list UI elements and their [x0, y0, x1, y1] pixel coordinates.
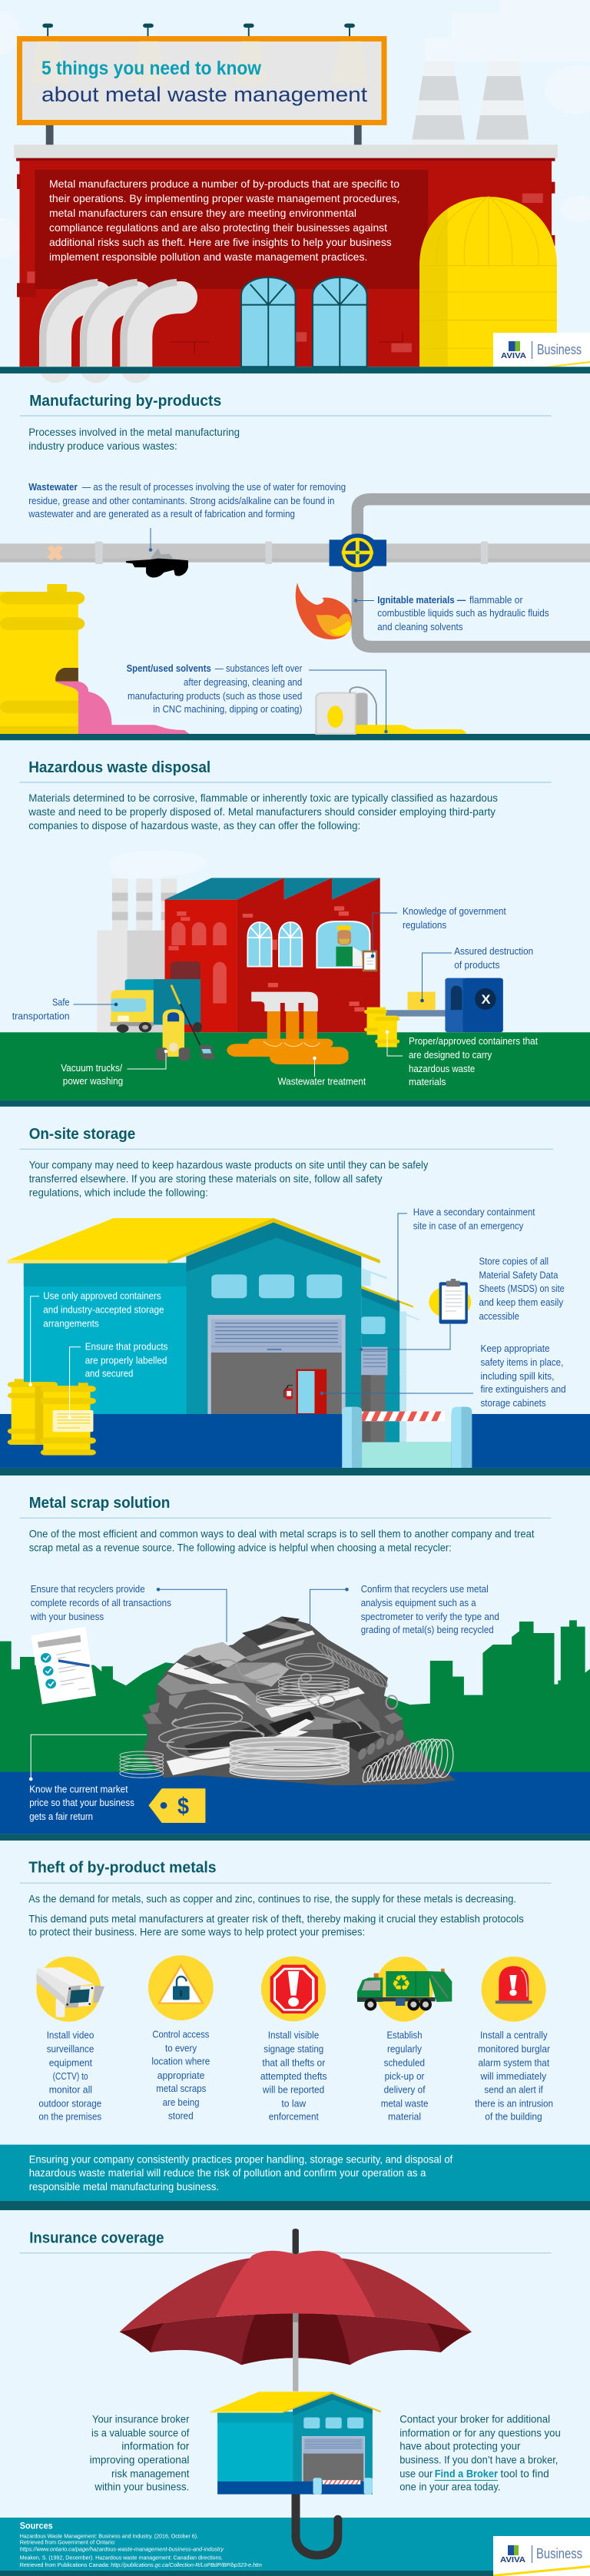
footer band	[0, 2518, 590, 2576]
callout: approved containers: materials	[409, 1076, 446, 1087]
section intro	[28, 1892, 524, 1938]
item: alarm text: will immediately	[480, 2070, 547, 2082]
flame	[296, 583, 352, 639]
sources: Meaken, S. (1992, December). Hazardous waste management: Canadian directions.	[20, 2554, 223, 2561]
callout: safe transportation: Safe	[52, 996, 69, 1007]
callout: safety items	[320, 1343, 566, 1409]
illustration: pipes and waste	[0, 500, 590, 740]
callout: approved containers: hazardous waste	[409, 1063, 475, 1074]
logo: Aviva Business: AVIVA	[501, 351, 526, 360]
sources	[20, 2521, 262, 2568]
item: alarm text: Install a centrally	[480, 2030, 548, 2041]
item: access control text: are being	[163, 2096, 200, 2108]
callout: knowledge of regulations: regulations	[403, 919, 447, 931]
callout: approved containers: arrangements	[43, 1318, 99, 1329]
callout: wastewater: — as the result of processes involving the use of water for removing	[82, 481, 346, 493]
broker text left: risk management	[111, 2468, 189, 2480]
item: alarm text: alarm system that	[478, 2057, 549, 2069]
illustration: factory building	[0, 0, 590, 373]
coil: centre stack	[230, 1737, 350, 1779]
broker text right: information or for any questions you	[399, 2427, 561, 2439]
callout: records: with your business	[30, 1611, 104, 1622]
intro text: metal manufacturers can ensure they are meeting environmental	[49, 207, 356, 219]
logo: Aviva Business footer: AVIVA	[500, 2555, 525, 2564]
section intro: transferred elsewhere. If you are storing these materials on site, follow all safety	[29, 1173, 383, 1185]
callout: vacuum trucks	[61, 1050, 167, 1087]
callout: assured destruction: Assured destruction	[454, 945, 533, 957]
broker text left: Your insurance broker	[92, 2413, 190, 2425]
item: access control text: stored	[168, 2110, 194, 2122]
item: pick-up text: pick-up or	[385, 2070, 425, 2082]
section intro: scrap metal as a revenue source. The following advice is helpful when choosing a metal recycler:	[29, 1542, 452, 1554]
clipboard icon	[429, 1279, 471, 1324]
section intro: Processes involved in the metal manufacturing	[28, 426, 240, 438]
icon: recycling symbol: ♻	[391, 1970, 411, 1996]
item: access control text: location where	[151, 2056, 210, 2067]
item: pick-up text: regularly	[387, 2043, 422, 2055]
item: pick-up text: material	[388, 2111, 421, 2123]
callout: records: complete records of all transactions	[31, 1597, 171, 1608]
icon: cctv camera	[36, 1957, 104, 2022]
callout: vacuum trucks: Vacuum trucks/	[61, 1062, 122, 1074]
intro text: compliance regulations and are also protecting their businesses against	[49, 221, 387, 234]
broker text right: Contact your broker for additional	[399, 2413, 550, 2425]
callout: secondary containment: site in case of an emergency	[413, 1220, 524, 1232]
callout: safety items: fire extinguishers and	[481, 1383, 566, 1395]
yellow drums	[364, 1007, 399, 1047]
heading: Hazardous waste disposal	[28, 759, 210, 776]
containment area	[342, 1347, 472, 1468]
panel: on-site storage	[0, 1126, 590, 1476]
silo	[419, 197, 557, 367]
heading: Theft of by-product metals	[28, 1860, 217, 1877]
faded rear building	[361, 1268, 419, 1442]
callout: safe transportation	[12, 996, 118, 1022]
item: pick-up text: scheduled	[384, 2057, 425, 2069]
spring: lower right	[361, 1738, 455, 1784]
item: access control text: to every	[165, 2043, 197, 2054]
sources: Retrieved from Publications Canada:	[20, 2561, 110, 2568]
callout: safety data sheets: Material Safety Data	[479, 1270, 559, 1281]
sources: Retrieved from Government of Ontario:	[20, 2539, 116, 2546]
icon: recycling truck	[357, 1957, 452, 2022]
broker text right: business. If you don’t have a broker,	[399, 2454, 558, 2466]
item: alarm text: there is an intrusion	[475, 2098, 553, 2110]
section intro: Your company may need to keep hazardous waste products on site until they can be safely	[29, 1159, 428, 1171]
callout: assured destruction: of products	[454, 959, 500, 971]
item: signage text: attempted thefts	[260, 2070, 327, 2082]
callout: spent solvents: — substances left over	[215, 662, 303, 674]
red door	[296, 1369, 326, 1414]
logo: Aviva Business footer	[493, 2536, 590, 2576]
clipboard	[363, 951, 377, 971]
umbrella canopy	[120, 2251, 472, 2365]
item: access control text: appropriate	[157, 2070, 204, 2081]
callout: approved containers: Proper/approved containers that	[409, 1035, 538, 1047]
icon: shredder x mark: X	[481, 992, 491, 1007]
item: signage text: enforcement	[269, 2111, 319, 2123]
callout: spent solvents: manufacturing products (such as those used	[128, 690, 302, 702]
illustration: city skyline	[0, 1620, 590, 1841]
broker text left: is a valuable source of	[91, 2427, 189, 2439]
broker text left	[90, 2413, 190, 2493]
factory	[165, 878, 380, 1032]
callout: vacuum trucks: power washing	[63, 1075, 123, 1087]
section intro: industry produce various wastes:	[28, 440, 177, 452]
valve	[330, 533, 386, 572]
callout: knowledge of regulations: Knowledge of government	[403, 905, 506, 917]
intro text: their operations. By implementing proper waste management procedures,	[49, 192, 399, 204]
section intro: This demand puts metal manufacturers at greater risk of theft, thereby making it crucial they establish protocols	[28, 1912, 524, 1924]
callout: approved containers: Use only approved containers	[43, 1290, 161, 1302]
callout: market price	[29, 1734, 147, 1822]
callout: approved containers: are designed to carry	[409, 1049, 492, 1061]
heading: Insurance coverage	[29, 2229, 164, 2246]
item: pick-up text: metal waste	[381, 2098, 428, 2110]
panel: hazardous waste disposal	[0, 759, 590, 1107]
title line 2: about metal waste management	[41, 83, 368, 106]
title line 1: 5 things you need to know	[41, 58, 262, 79]
billboard title	[20, 24, 384, 122]
callout: assured destruction	[420, 945, 533, 1002]
item: cctv text	[38, 2030, 102, 2123]
broker text right	[399, 2413, 561, 2493]
broker text right: use our	[399, 2468, 433, 2480]
intro text	[49, 178, 399, 263]
callout: analysis equipment: analysis equipment such as a	[361, 1597, 476, 1608]
item: cctv text: outdoor storage	[38, 2098, 101, 2110]
billboard lamps	[30, 24, 369, 85]
item: signage text: signage stating	[264, 2043, 323, 2055]
callout: ignitable materials: and cleaning solvents	[377, 621, 463, 632]
windows	[241, 277, 367, 367]
broker text right: Find a Broker	[435, 2468, 498, 2480]
callout: ignitable materials	[354, 594, 549, 632]
roof	[8, 1218, 380, 1263]
section intro: to protect their business. Here are some ways to help protect your premises:	[28, 1926, 365, 1938]
panel: insurance coverage	[0, 2229, 590, 2576]
callout band: conclusion: responsible metal manufacturing business.	[29, 2180, 219, 2193]
callout: approved containers: and industry-accepted storage	[43, 1304, 164, 1316]
section intro: waste and need to be properly disposed of. Metal manufacturers should consider employing third-party	[28, 805, 496, 818]
callout: spent solvents: after degreasing, cleaning and	[184, 676, 302, 688]
item: signage text	[260, 2030, 327, 2123]
illustration: disposal factory	[0, 851, 590, 1107]
callout: spent solvents	[127, 662, 388, 733]
section intro	[29, 1528, 535, 1554]
callout: labelled products: and secured	[85, 1368, 133, 1379]
solvent can	[316, 687, 466, 734]
item: pick-up text	[381, 2030, 428, 2123]
worker window	[317, 921, 370, 968]
item: cctv text: Install video	[47, 2030, 94, 2041]
callout: market price: price so that your business	[29, 1797, 134, 1808]
callout: safety data sheets	[360, 1256, 565, 1351]
callout: safety data sheets: Sheets (MSDS) on site	[479, 1283, 565, 1294]
broker text left: improving operational	[90, 2454, 189, 2466]
section intro	[28, 792, 498, 832]
yellow barrel	[0, 584, 85, 734]
item: cctv text: surveillance	[47, 2043, 94, 2055]
heading: Metal scrap solution	[29, 1495, 170, 1512]
section intro: regulations, which include the following:	[29, 1187, 208, 1199]
item: signage text: to law	[281, 2098, 307, 2110]
item: cctv text: (CCTV) to	[53, 2070, 88, 2082]
callout: wastewater	[28, 481, 346, 552]
panel: header factory	[0, 0, 590, 373]
section intro: Materials determined to be corrosive, flammable or inherently toxic are typically classified as hazardous	[28, 792, 498, 804]
item: signage text: that all thefts or	[262, 2057, 326, 2069]
callout: market price: gets a fair return	[29, 1811, 93, 1822]
item: pick-up text: Establish	[387, 2030, 423, 2041]
illustration: scrap pile	[120, 1616, 456, 1785]
section intro	[29, 1159, 428, 1199]
callout: analysis equipment: grading of metal(s) being recycled	[361, 1624, 494, 1635]
item: cctv text: equipment	[49, 2057, 92, 2069]
broker text right: tool to find	[501, 2468, 549, 2480]
callout: wastewater treatment: Wastewater treatment	[278, 1076, 366, 1087]
price tag	[148, 1788, 205, 1823]
icon: dollar sign: $	[177, 1792, 189, 1819]
checklist paper	[31, 1627, 96, 1705]
item: signage text: will be reported	[262, 2084, 324, 2096]
logo: Aviva Business	[493, 333, 590, 367]
callout: ignitable materials: flammable or	[469, 594, 523, 606]
wastewater pipes	[227, 992, 349, 1064]
intro text: additional risks such as theft. Here are five insights to help your business	[49, 236, 392, 248]
illustration: warehouse	[0, 1218, 590, 1476]
callout: labelled products	[68, 1341, 168, 1419]
callout: safety data sheets: Store copies of all	[479, 1256, 549, 1267]
callout: approved containers	[386, 1031, 538, 1087]
icon: unlocked padlock	[148, 1955, 214, 2020]
fire extinguisher	[284, 1386, 293, 1399]
icon: stop sign	[261, 1957, 326, 2021]
spring: upper right	[316, 1641, 389, 1689]
callout: spent solvents: in CNC machining, dipping or coating)	[153, 703, 302, 715]
intro text: implement responsible pollution and waste management practices.	[49, 251, 367, 263]
power washer	[156, 985, 215, 1061]
item: cctv text: monitor all	[49, 2084, 92, 2096]
truck	[111, 979, 202, 1033]
heading: On-site storage	[29, 1126, 135, 1143]
intro text: Metal manufacturers produce a number of by-products that are specific to	[49, 178, 399, 190]
broker text right: one in your area today.	[399, 2481, 501, 2493]
broker text left: within your business.	[94, 2481, 189, 2493]
callout band: conclusion: Ensuring your company consistently practices proper handling, storage security, and disposal of	[29, 2153, 452, 2166]
callout band: conclusion: hazardous waste material will reduce the risk of pollution and confirm your operation as a	[29, 2166, 426, 2179]
item: access control text: Control access	[152, 2029, 210, 2040]
item: access control text	[151, 2029, 210, 2122]
conveyor and shredder	[386, 978, 503, 1032]
item: signage text: Install visible	[268, 2030, 319, 2041]
icon: alarm light	[482, 1957, 546, 2022]
item: alarm text: send an alert if	[484, 2084, 543, 2096]
callout: safety data sheets: accessible	[479, 1310, 519, 1322]
item: cctv text: on the premises	[38, 2111, 102, 2123]
broker text left: information for	[121, 2440, 190, 2452]
mini warehouse	[210, 2392, 381, 2495]
callout: safety data sheets: and keep them easily	[479, 1296, 564, 1308]
pipes	[43, 282, 181, 367]
item: alarm text: of the building	[485, 2111, 542, 2123]
callout: safety items: storage cabinets	[481, 1397, 546, 1409]
wire loops	[159, 1659, 397, 1759]
barrier	[362, 1412, 445, 1421]
sources: Sources	[20, 2521, 53, 2531]
chimneys	[97, 878, 177, 1032]
callout: wastewater treatment	[278, 1057, 366, 1087]
panel: metal scrap solution	[0, 1495, 590, 1841]
sources: http://publications.gc.ca/Collection-R/LoPBdP/BP/bp323-e.htm	[111, 2561, 262, 2568]
panel: theft of by-product metals	[0, 1860, 590, 2210]
callout: wastewater: residue, grease and other contaminants. Strong acids/alkaline can be found in	[28, 495, 334, 506]
callout: safe transportation: transportation	[12, 1011, 70, 1022]
callout: approved containers	[28, 1290, 164, 1386]
sources: https://www.ontario.ca/page/hazardous-waste-management-business-and-industry	[20, 2546, 224, 2553]
callout: market price: Know the current market	[29, 1784, 128, 1795]
callout: knowledge of regulations	[371, 905, 506, 958]
broker text right: have about protecting your	[399, 2440, 521, 2452]
callout: labelled products: are properly labelled	[85, 1355, 167, 1366]
callout: safety items: safety items in place,	[481, 1356, 563, 1368]
callout: ignitable materials: Ignitable materials —	[377, 594, 466, 606]
callout: wastewater: Wastewater	[28, 481, 78, 493]
item: pick-up text: delivery of	[384, 2084, 426, 2096]
arched windows	[247, 922, 302, 967]
sources: Hazardous Waste Management: Business and Industry. (2016, October 6).	[20, 2533, 198, 2540]
callout: secondary containment	[396, 1207, 535, 1303]
callout: analysis equipment	[310, 1583, 499, 1635]
panel: manufacturing by-products	[0, 393, 590, 740]
item: access control text: metal scraps	[156, 2083, 207, 2094]
callout: analysis equipment: Confirm that recyclers use metal	[361, 1583, 489, 1595]
callout: labelled products: Ensure that products	[85, 1341, 168, 1353]
callout: analysis equipment: spectrometer to verify the type and	[361, 1611, 499, 1622]
section intro: As the demand for metals, such as copper and zinc, continues to rise, the supply for these metals is decreasing.	[28, 1892, 516, 1904]
callout: records	[30, 1583, 227, 1642]
section intro: One of the most efficient and common ways to deal with metal scraps is to sell them to another company and treat	[29, 1528, 535, 1540]
yellow drums	[8, 1379, 96, 1456]
item: alarm text: monitored burglar	[478, 2043, 551, 2055]
heading: Manufacturing by-products	[29, 393, 221, 410]
callout: safety items: Keep appropriate	[481, 1343, 550, 1354]
callout: wastewater: wastewater and are generated as a result of fabrication and forming	[28, 508, 295, 520]
callout: safety items: including spill kits,	[481, 1370, 555, 1382]
callout: spent solvents: Spent/used solvents	[127, 662, 211, 674]
callout: records: Ensure that recyclers provide	[31, 1583, 145, 1595]
coil: small left	[120, 1751, 164, 1778]
coils: upper middle	[257, 1654, 349, 1706]
callout: secondary containment: Have a secondary containment	[413, 1207, 535, 1218]
item: alarm text	[475, 2030, 553, 2123]
callout: ignitable materials: combustible liquids such as hydraulic fluids	[377, 607, 549, 619]
section intro: companies to dispose of hazardous waste, as they can offer the following:	[28, 819, 360, 832]
illustration: umbrella shaft and warehouse	[210, 2229, 381, 2555]
callout band: conclusion	[0, 2145, 590, 2210]
section intro	[28, 426, 240, 452]
garage door	[207, 1315, 346, 1414]
